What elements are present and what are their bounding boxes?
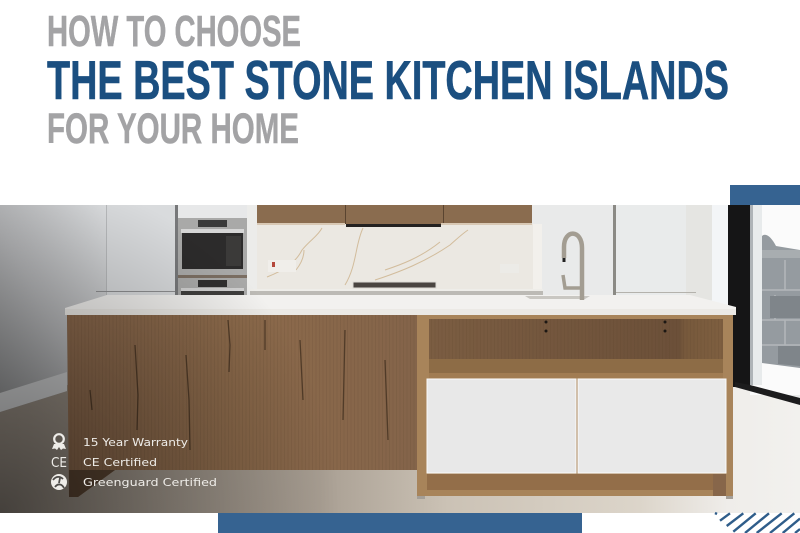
open shelf unit <box>417 315 733 499</box>
icon: award ribbon <box>52 434 66 450</box>
dark vignette bottom left <box>0 205 340 513</box>
marble backsplash <box>257 224 542 290</box>
title line: for your home: FOR YOUR HOME <box>47 105 299 153</box>
kitchen photo illustration <box>0 205 800 513</box>
window <box>728 205 800 405</box>
icon: greenguard globe <box>51 474 67 490</box>
warranty row <box>52 434 188 450</box>
skirting board <box>0 372 67 412</box>
cooktop <box>353 282 436 288</box>
diagonal stripes: bottom right <box>715 513 800 533</box>
title <box>47 7 729 153</box>
icon: ce mark: CE <box>51 456 67 471</box>
tall white cabinets <box>96 205 728 305</box>
ce row <box>51 456 157 471</box>
ce label: CE Certified <box>83 457 157 469</box>
greenguard label: Greenguard Certified <box>83 477 217 489</box>
wood upper cabinets <box>257 205 532 227</box>
floor <box>0 385 800 513</box>
white cabinet doors <box>427 379 726 473</box>
oven <box>178 218 247 296</box>
left tall panel <box>106 205 176 300</box>
faucet <box>563 234 582 300</box>
warranty label: 15 Year Warranty <box>83 437 188 449</box>
title line: how to choose: HOW TO CHOOSE <box>47 7 301 56</box>
certifications list <box>51 434 217 490</box>
stone countertop <box>65 295 736 315</box>
back counter <box>250 289 543 291</box>
wood island body <box>67 315 417 497</box>
greenguard row <box>51 474 217 490</box>
left wall <box>0 205 107 412</box>
blue accent bar: bottom center <box>218 513 582 533</box>
blue accent bar: top right <box>730 185 800 205</box>
